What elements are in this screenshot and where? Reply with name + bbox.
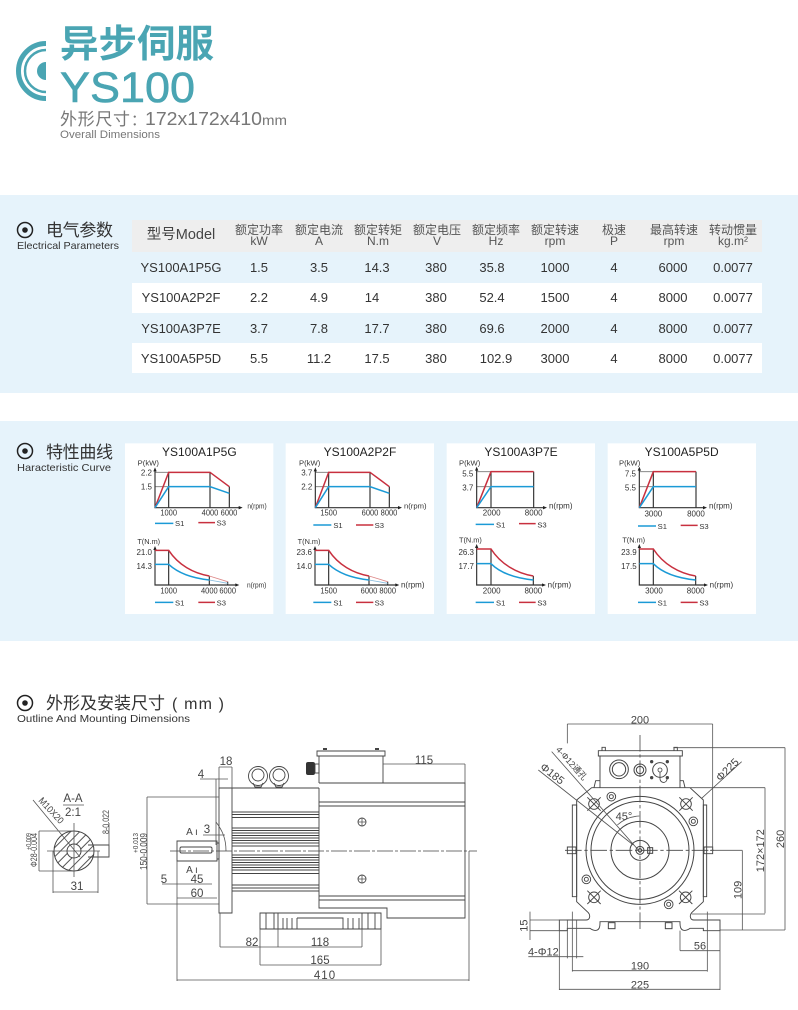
power curve chart: 1500	[320, 509, 338, 518]
eye bolts	[248, 766, 288, 788]
table header: rpm	[664, 234, 684, 248]
dimension labels: 4-Φ12	[528, 947, 559, 959]
dimension labels: 115	[415, 755, 433, 767]
row: YS100A1P5G: YS100A1P5G	[141, 260, 221, 275]
row: YS100A3P7E: 2000	[541, 321, 569, 336]
dimension labels: 3	[204, 824, 210, 836]
row: YS100A2P2F: 8000	[659, 290, 687, 305]
row: YS100A2P2F: 380	[425, 290, 447, 305]
torque curve chart: 8000	[687, 586, 705, 595]
power curve chart: S1	[333, 521, 343, 530]
power curve chart: 1000	[160, 509, 178, 518]
row: YS100A5P5D	[141, 351, 753, 366]
power curve chart: S3	[537, 520, 547, 529]
dimension labels: Φ185	[537, 761, 566, 787]
center lines	[565, 735, 714, 930]
dimension labels: 165	[310, 955, 330, 967]
table header: 额定频率	[472, 221, 520, 238]
dimension labels: Φ225	[714, 756, 742, 784]
dimension labels	[519, 714, 787, 992]
power curve chart	[299, 458, 427, 530]
power curve chart: 6000	[221, 509, 238, 518]
torque curve chart: 14.3	[136, 562, 153, 571]
table header: 额定转矩	[354, 221, 402, 238]
table header: kW	[250, 234, 268, 248]
table header: N.m	[367, 234, 389, 248]
power curve chart: P(kW)	[459, 458, 481, 467]
table header: 最高转速	[650, 221, 698, 238]
drawing: shaft cross section A-A: 31	[71, 881, 83, 893]
chart card: YS100A1P5G	[125, 443, 273, 614]
power curve chart	[459, 458, 573, 529]
dimension labels: 410	[314, 970, 336, 982]
row: YS100A3P7E: 8000	[659, 321, 687, 336]
drawing: shaft cross section A-A: M10X20	[36, 796, 66, 826]
panel: electrical parameters	[0, 195, 798, 393]
row: YS100A5P5D: YS100A5P5D	[141, 351, 221, 366]
power curve chart: S3	[699, 522, 709, 531]
power curve chart: 8000	[687, 510, 705, 519]
row: YS100A2P2F: 4	[610, 290, 618, 305]
row: YS100A1P5G: 35.8	[479, 260, 505, 275]
torque curve chart: 17.7	[458, 562, 475, 571]
chart card: YS100A5P5D: YS100A5P5D	[645, 445, 719, 459]
chart card: YS100A3P7E	[447, 443, 595, 614]
row: YS100A5P5D: 380	[425, 351, 447, 366]
power curve chart: 5.5	[462, 469, 474, 478]
torque curve chart: 1500	[320, 586, 338, 595]
dimension labels: 109	[733, 881, 745, 899]
drawing: shaft cross section A-A: +0.009	[26, 833, 33, 850]
torque curve chart: 6000	[219, 586, 237, 595]
torque curve chart: S1	[333, 598, 343, 607]
motor fins	[232, 812, 319, 891]
chart card: YS100A2P2F: YS100A2P2F	[324, 445, 396, 459]
chart card: YS100A5P5D	[608, 443, 756, 614]
torque curve chart: S3	[217, 598, 226, 607]
table header	[147, 221, 757, 248]
concentric circles	[586, 796, 694, 904]
drawing: motor front view	[519, 714, 787, 992]
dimension labels: 150-0.009	[139, 833, 150, 870]
table header: 极速	[602, 221, 626, 238]
table header: V	[433, 234, 441, 248]
drawing: motor side view	[131, 748, 477, 982]
power curve chart: 4000	[202, 509, 219, 518]
power curve chart: S3	[217, 519, 226, 528]
dimension labels	[131, 755, 433, 982]
icon: section bullet	[18, 696, 32, 710]
power curve chart: P(kW)	[299, 458, 321, 467]
table header: P	[610, 234, 618, 248]
chart card: YS100A2P2F	[286, 443, 434, 614]
table header: kg.m²	[718, 234, 748, 248]
row: YS100A3P7E: 4	[610, 321, 618, 336]
torque curve chart: 23.9	[621, 548, 637, 557]
torque curve chart: S1	[175, 598, 184, 607]
row: YS100A5P5D: 0.0077	[713, 351, 753, 366]
section: outline and mounting dimensions	[17, 689, 787, 992]
row: YS100A1P5G: 1.5	[250, 260, 268, 275]
torque curve chart: n(rpm)	[710, 581, 734, 590]
subheading: outline dimensions: Outline And Mounting Dimensions	[17, 713, 190, 725]
icon: section bullet	[18, 222, 32, 238]
torque curve chart: S1	[658, 598, 667, 607]
row: YS100A2P2F: 52.4	[479, 290, 505, 305]
torque curve chart: n(rpm)	[548, 581, 572, 590]
power curve chart: n(rpm)	[404, 502, 427, 511]
row: YS100A1P5G: 4	[610, 260, 618, 275]
dimension labels: 56	[694, 940, 706, 952]
power curve chart: P(kW)	[619, 458, 641, 467]
torque curve chart	[136, 537, 267, 607]
chart card: YS100A1P5G: YS100A1P5G	[162, 445, 237, 459]
row: YS100A1P5G	[141, 260, 753, 275]
dimension labels: 172×172	[755, 829, 767, 872]
torque curve chart: 1000	[160, 586, 178, 595]
power curve chart: S3	[375, 521, 384, 530]
dimension labels: 82	[246, 937, 258, 949]
dimension labels: 15	[519, 920, 531, 932]
row: YS100A3P7E	[141, 321, 753, 336]
motor foot	[260, 913, 381, 929]
overall dimensions text: 外形尺寸	[60, 105, 130, 130]
power curve chart: n(rpm)	[709, 502, 733, 511]
heading unit: ( mm )	[172, 696, 224, 713]
icon: logo arcs	[18, 44, 46, 98]
row: YS100A1P5G: 380	[425, 260, 447, 275]
torque curve chart: 21.0	[136, 548, 153, 557]
row: YS100A1P5G: 3.5	[310, 260, 328, 275]
row: YS100A2P2F: 4.9	[310, 290, 328, 305]
power curve chart: S1	[496, 520, 505, 529]
flange and shaft	[177, 788, 319, 913]
torque curve chart: 17.5	[621, 562, 637, 571]
terminal box	[306, 748, 385, 783]
torque curve chart: 14.0	[296, 562, 313, 571]
overall dimensions text: mm	[262, 113, 287, 128]
torque curve chart: S1	[496, 598, 505, 607]
icon: section bullet	[18, 444, 32, 458]
power curve chart: 2.2	[301, 483, 313, 492]
row: YS100A2P2F: YS100A2P2F	[142, 290, 220, 305]
row: YS100A3P7E: 17.7	[364, 321, 390, 336]
torque curve chart: 8000	[524, 586, 543, 595]
rear housing	[319, 783, 465, 918]
table header: 额定电压	[413, 221, 461, 238]
header block	[18, 13, 287, 141]
table header: rpm	[545, 234, 565, 248]
title: product type: 异步伺服	[60, 13, 214, 68]
power curve chart: 6000	[362, 509, 379, 518]
dimension labels: 260	[775, 830, 787, 848]
dimension lines	[528, 724, 785, 990]
dimension labels: 200	[631, 714, 649, 726]
row: YS100A5P5D: 102.9	[480, 351, 512, 366]
subheading: electrical parameters: Electrical Parameters	[17, 240, 119, 252]
table header: 额定电流	[295, 221, 343, 238]
torque curve chart: 26.3	[458, 548, 475, 557]
dimension labels: 18	[220, 756, 232, 768]
power curve chart: 2.2	[141, 468, 153, 477]
power curve chart: 3.7	[301, 468, 313, 477]
dimension labels: 4	[198, 769, 205, 781]
torque curve chart: T(N.m)	[622, 536, 645, 545]
drawing: shaft cross section A-A: Φ28-0.004	[29, 833, 39, 867]
torque curve chart: 2000	[483, 586, 501, 595]
torque curve chart	[458, 536, 572, 607]
table header: 额定转速	[531, 221, 579, 238]
row: YS100A2P2F	[142, 290, 753, 305]
power curve chart: 3.7	[462, 484, 474, 493]
row: YS100A2P2F: 1500	[541, 290, 569, 305]
torque curve chart: 4000	[201, 586, 218, 595]
torque curve chart	[296, 537, 425, 607]
row: YS100A3P7E: 3.7	[250, 321, 268, 336]
torque curve chart: T(N.m)	[459, 536, 482, 545]
drawing: shaft cross section A-A	[26, 793, 112, 893]
table header: 转动惯量	[709, 221, 757, 238]
drawing: shaft cross section A-A: A-A	[63, 793, 83, 805]
heading: outline dimensions: 外形及安装尺寸	[46, 689, 165, 714]
row: YS100A1P5G: 0.0077	[713, 260, 753, 275]
torque curve chart: T(N.m)	[137, 537, 160, 546]
table header: 额定功率	[235, 221, 283, 238]
torque curve chart: n(rpm)	[401, 581, 425, 590]
row: YS100A1P5G: 1000	[541, 260, 569, 275]
dimension labels: +0.013	[131, 833, 140, 853]
dimension labels: 45°	[616, 811, 632, 823]
torque curve chart: 8000	[379, 586, 397, 595]
torque curve chart: 23.6	[296, 548, 313, 557]
dimension labels: 5	[161, 874, 167, 886]
row: YS100A3P7E: 0.0077	[713, 321, 753, 336]
power curve chart: 2000	[483, 509, 501, 518]
dimension labels: 45	[191, 874, 203, 886]
row: YS100A5P5D: 5.5	[250, 351, 268, 366]
row: YS100A1P5G: 14.3	[364, 260, 390, 275]
torque curve chart: n(rpm)	[247, 581, 267, 590]
power curve chart: 3000	[644, 510, 663, 519]
row: YS100A1P5G: 6000	[659, 260, 687, 275]
dimension labels: A ı	[186, 827, 198, 838]
torque curve chart: T(N.m)	[298, 537, 320, 546]
torque curve chart: S3	[699, 598, 709, 607]
overall dimensions text	[60, 105, 287, 130]
title: model name: YS100	[60, 64, 195, 112]
heading: electrical parameters: 电气参数	[46, 216, 113, 241]
dimension labels: 118	[311, 937, 329, 949]
motor end plate	[559, 788, 720, 931]
row: YS100A3P7E: 7.8	[310, 321, 328, 336]
power curve chart: 8000	[381, 509, 398, 518]
drawing: shaft cross section A-A: 2:1	[65, 807, 81, 819]
power curve chart: P(kW)	[138, 458, 159, 467]
table header: 型号Model	[147, 226, 215, 243]
torque curve chart: S3	[537, 598, 547, 607]
dimension labels: 4-Φ12通孔	[554, 745, 589, 782]
row: YS100A5P5D: 17.5	[364, 351, 390, 366]
power curve chart	[619, 458, 733, 531]
table header: A	[315, 234, 323, 248]
dimension labels: 60	[191, 888, 203, 900]
center line	[170, 850, 477, 852]
row: YS100A3P7E: 380	[425, 321, 447, 336]
power curve chart: 5.5	[625, 484, 637, 493]
row: YS100A5P5D: 8000	[659, 351, 687, 366]
torque curve chart	[621, 536, 734, 607]
drawing: shaft cross section A-A: 8-0.022	[101, 810, 112, 834]
power curve chart: n(rpm)	[247, 502, 267, 511]
table header: Hz	[489, 234, 503, 248]
dimension lines	[147, 764, 469, 981]
subtitle: overall dimensions: Overall Dimensions	[60, 129, 161, 141]
power curve chart: 1.5	[141, 483, 153, 492]
power curve chart	[138, 458, 267, 528]
overall dimensions text: 172x172x410	[145, 109, 262, 129]
power curve chart: S1	[658, 522, 667, 531]
row: YS100A5P5D: 4	[610, 351, 618, 366]
dimension labels: 225	[631, 980, 649, 992]
row: YS100A2P2F: 14	[365, 290, 379, 305]
torque curve chart: 3000	[645, 586, 663, 595]
dimension labels: A ı	[186, 865, 198, 876]
row: YS100A5P5D: 11.2	[307, 351, 331, 366]
power curve chart: n(rpm)	[549, 502, 573, 511]
terminal box front	[594, 747, 685, 788]
mounting holes	[582, 792, 698, 909]
torque curve chart: S3	[375, 598, 384, 607]
row: YS100A2P2F: 2.2	[250, 290, 268, 305]
row: YS100A5P5D: 3000	[541, 351, 569, 366]
dimension labels: 190	[631, 961, 649, 973]
power curve chart: 8000	[525, 509, 543, 518]
power curve chart: S1	[175, 519, 184, 528]
panel: characteristic curves	[0, 421, 798, 641]
row: YS100A3P7E: YS100A3P7E	[141, 321, 221, 336]
row: YS100A3P7E: 69.6	[479, 321, 505, 336]
power curve chart: 7.5	[625, 469, 637, 478]
parameter table	[132, 220, 762, 373]
subheading: characteristic curves: Haracteristic Curve	[17, 462, 111, 474]
chart card: YS100A3P7E: YS100A3P7E	[484, 445, 558, 459]
torque curve chart: 6000	[361, 586, 378, 595]
overall dimensions text: ：	[131, 109, 146, 130]
row: YS100A2P2F: 0.0077	[713, 290, 753, 305]
heading: characteristic curves: 特性曲线	[46, 438, 113, 463]
